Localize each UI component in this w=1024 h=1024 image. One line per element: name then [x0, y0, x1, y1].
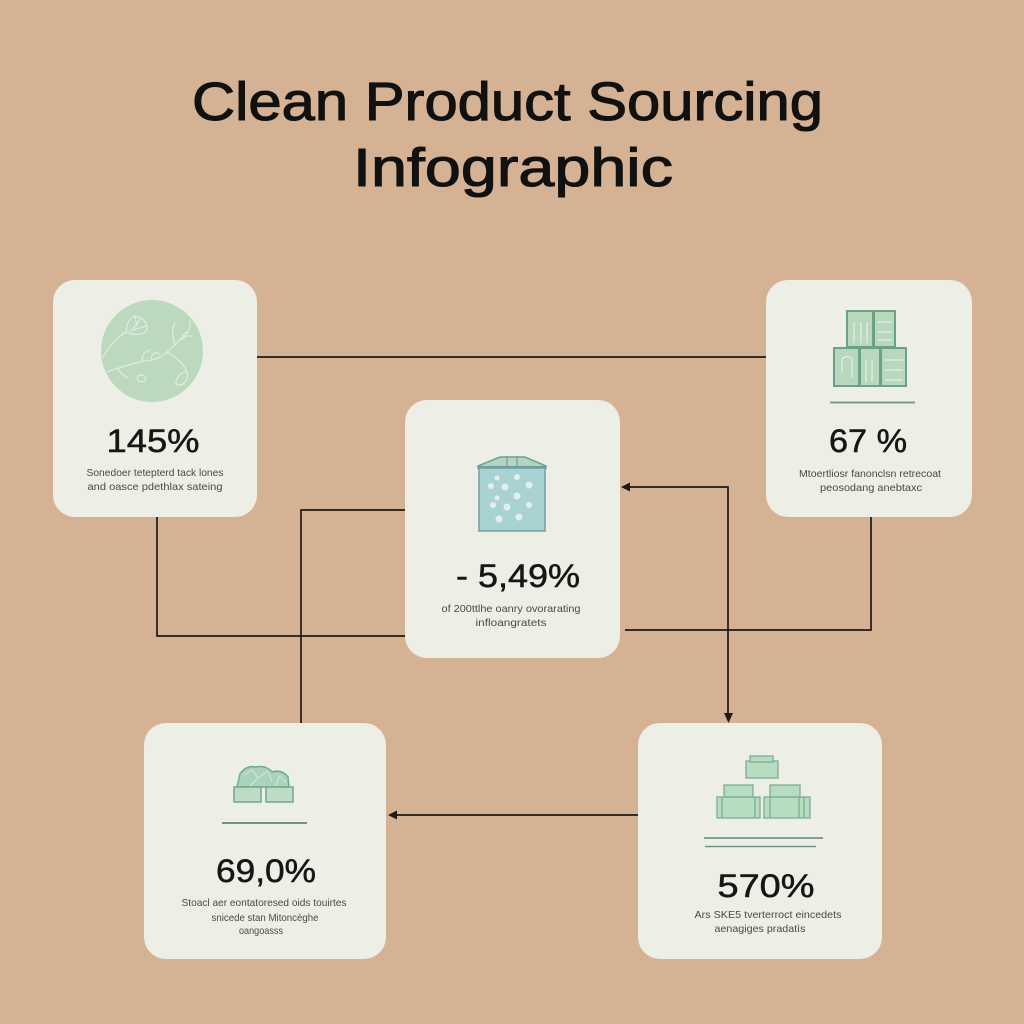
caption: infloangratets	[476, 617, 546, 629]
panel: lower-right card	[638, 723, 882, 959]
icon: stacked crates	[834, 311, 906, 386]
stat: 67 %	[829, 423, 907, 459]
icon: botanical circle	[101, 300, 203, 402]
icon: crates with produce	[234, 767, 293, 802]
caption: of 200ttlhe oanry ovorarating	[442, 603, 581, 615]
icon: blue storage bin	[478, 456, 546, 531]
panel: top-right card	[766, 280, 972, 517]
caption: oangoasss	[239, 925, 283, 937]
stat: 570%	[718, 868, 814, 904]
caption	[86, 467, 224, 493]
caption: Mtoertliosr fanonclsn retrecoat	[799, 468, 941, 480]
arrow: into centre card and down to lower-right card	[621, 482, 733, 723]
caption: Ars SKE5 tverterroct eincedets	[694, 909, 842, 921]
caption: aenagiges pradatìs	[714, 923, 806, 935]
panel: top-left card	[53, 280, 257, 517]
divider lines	[704, 838, 823, 846]
caption: snicede stan Mitoncèghe	[212, 912, 319, 924]
caption	[799, 468, 941, 494]
caption	[442, 603, 581, 629]
divider	[830, 402, 915, 404]
caption: Sonedoer tetepterd tack lones	[86, 467, 224, 479]
connector: top cards link	[257, 356, 766, 358]
stat: 69,0%	[216, 853, 316, 889]
panel: lower-left card	[144, 723, 386, 959]
caption	[182, 897, 346, 937]
stat: - 5,49%	[456, 558, 580, 594]
connector: right card to centre card	[625, 517, 871, 630]
caption: and oasce pdethlax sateing	[88, 481, 223, 493]
caption: Stoacl aer eontatoresed oids touirtes	[182, 897, 346, 909]
stat: 145%	[106, 423, 200, 459]
divider	[222, 822, 307, 824]
caption	[694, 909, 842, 935]
caption: peosodang anebtaxc	[820, 482, 922, 494]
connector: left card to centre card	[157, 517, 405, 636]
title: Infographic	[353, 138, 673, 198]
arrow: lower-right card to lower-left card	[388, 810, 638, 820]
title	[192, 72, 823, 198]
title: Clean Product Sourcing	[192, 72, 823, 132]
panel: centre card	[405, 400, 620, 658]
connector: centre card to lower-left card	[301, 510, 405, 723]
icon: three packages	[717, 756, 810, 818]
